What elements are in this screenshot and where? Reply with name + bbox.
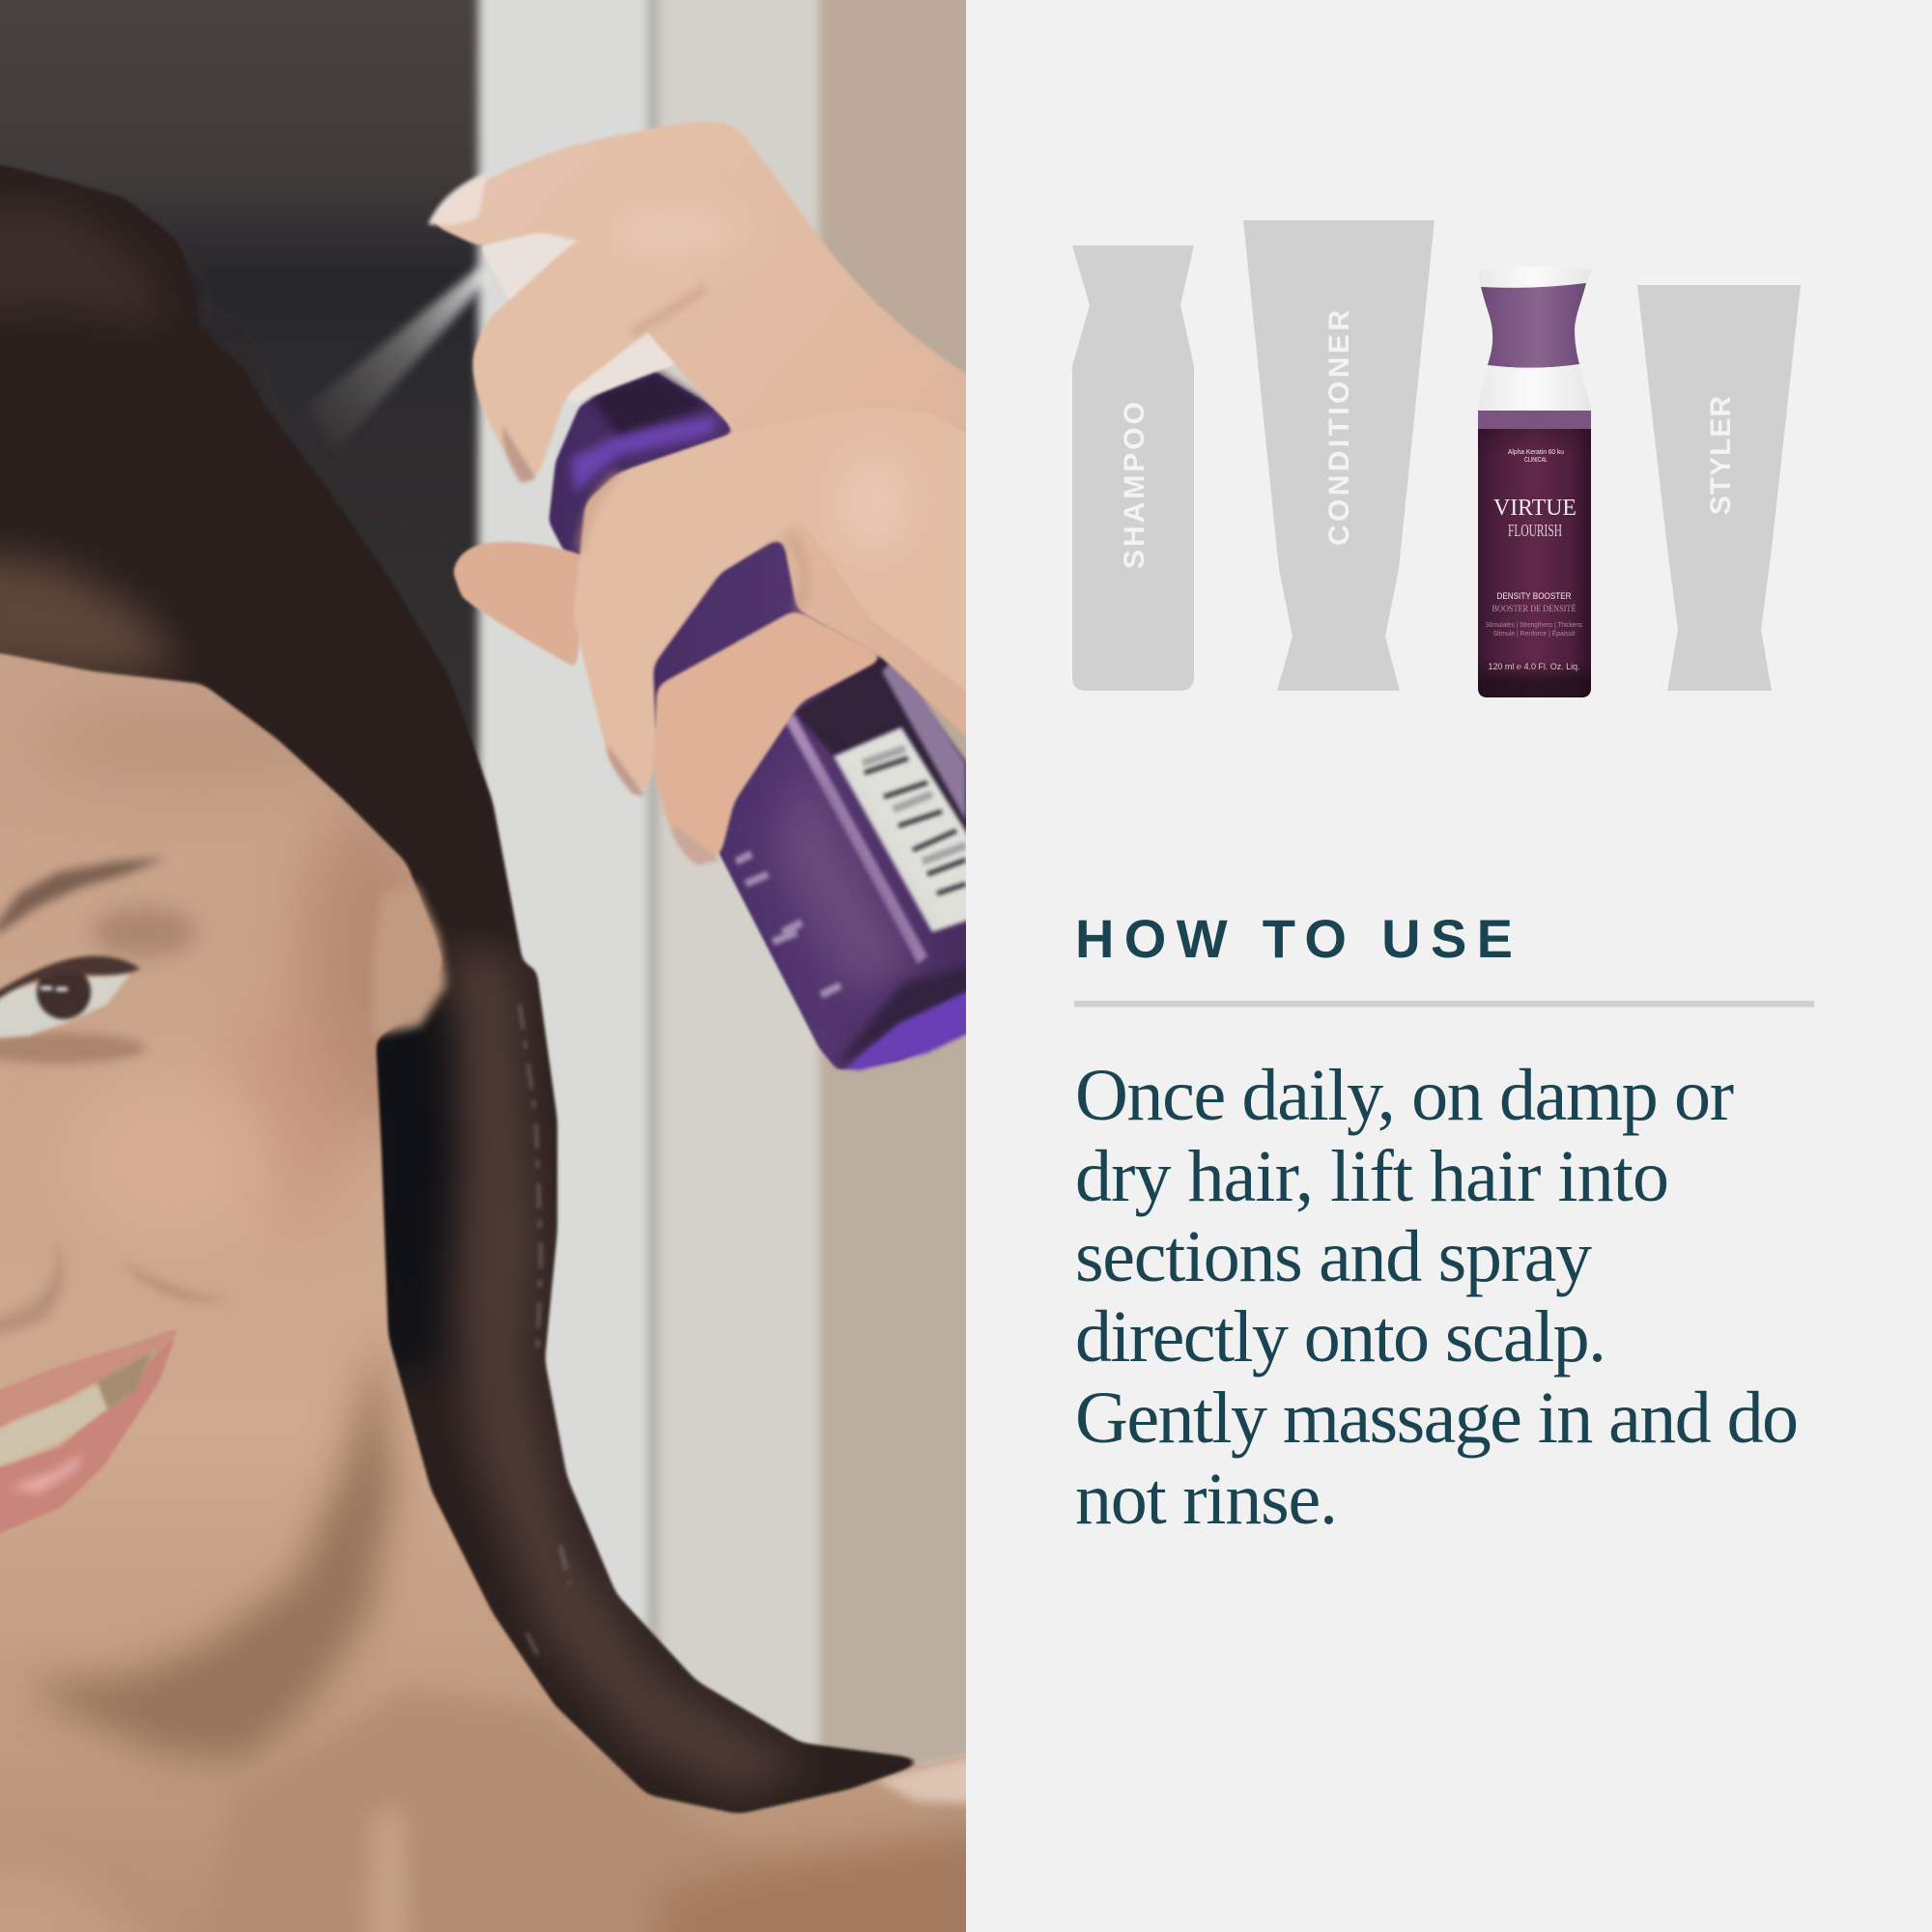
printed text marks on bottle [736, 854, 840, 995]
thumb [453, 542, 591, 668]
bottle label text: Alpha Keratin 60 ku [1508, 447, 1564, 456]
instructions text block: dry hair, lift hair into [1075, 1136, 1669, 1217]
woman: nose and smile line [0, 1236, 232, 1335]
white barcode label [834, 727, 1005, 932]
striped text strip on label [882, 657, 966, 821]
instructions text block [1075, 1055, 1799, 1540]
middle finger nail [607, 744, 645, 796]
soft facial shading [29, 700, 483, 1913]
shampoo silhouette: SHAMPOO [1119, 402, 1151, 569]
small nail [502, 425, 536, 483]
instructions text block: directly onto scalp. [1075, 1296, 1606, 1378]
bottle shoulder glint [570, 415, 720, 493]
bottle label text: Stimulates | Strengthens | Thickens [1486, 620, 1582, 629]
dark panel above barcode [795, 654, 1005, 850]
woman: stray hairs and hair-edge flecks [179, 242, 570, 1662]
conditioner silhouette: CONDITIONER [1323, 310, 1355, 546]
bottle label text: FLOURISH [1508, 521, 1562, 540]
divider rule [1074, 1001, 1814, 1007]
white spray pump cap [480, 208, 681, 404]
dark bottle base band [838, 956, 1005, 1063]
woman: eyebrow and eye [0, 858, 198, 1064]
side highlight line [784, 714, 927, 964]
photo background: dark doorway, white pillars and beige wall [0, 0, 1024, 1932]
heading: how to use: HOW TO USE [1075, 908, 1513, 969]
instructions text block: Once daily, on damp or [1075, 1055, 1734, 1136]
bottle label text: VIRTUE [1493, 496, 1577, 521]
fingernail on index finger [428, 172, 488, 225]
middle finger [573, 407, 1024, 796]
bottle label text [1486, 447, 1582, 671]
woman: skin of face, neck and chest [0, 618, 1005, 1932]
bright purple bottle base [845, 974, 1005, 1070]
instructions text block: not rinse. [1075, 1459, 1338, 1540]
bottle label text: BOOSTER DE DENSITÉ [1492, 603, 1577, 614]
product bottle held in hand [549, 367, 1005, 1070]
shoulder highlight [874, 1748, 1005, 1804]
panel: photo of woman spraying product on scalp [0, 0, 966, 1932]
bottle label text: CLINICAL [1524, 455, 1548, 464]
woman: ear [372, 884, 446, 1036]
product lineup: routine bottles [1072, 220, 1801, 697]
spray mist [307, 267, 488, 454]
styler silhouette [1637, 285, 1801, 691]
ring finger [653, 610, 887, 863]
interior hair tones clipped to hair silhouette [0, 203, 811, 1797]
collarbone highlight [365, 1806, 411, 1932]
hand holding bottle [428, 122, 1024, 866]
woman: smiling mouth [0, 1325, 185, 1546]
styler silhouette: STYLER [1705, 396, 1737, 515]
woman: dark hair [0, 164, 932, 1814]
finger creases [580, 288, 805, 611]
chest shadow [657, 1826, 1005, 1932]
bottle dark collar [589, 372, 710, 435]
conditioner silhouette [1243, 220, 1435, 691]
lower bottle sheen [773, 763, 918, 995]
neck base tone [193, 1690, 773, 1932]
shampoo silhouette [1072, 245, 1194, 691]
bottle label text: Stimule | Renforce | Épaissit [1493, 629, 1576, 638]
instructions text block: Gently massage in and do [1075, 1378, 1799, 1459]
bottle body [549, 367, 1005, 1070]
bottle label text: DENSITY BOOSTER [1497, 591, 1572, 602]
panel: how to use content [1072, 220, 1814, 1540]
jaw shadow under chin [24, 1336, 394, 1761]
instructions text block: sections and spray [1075, 1216, 1592, 1297]
back of hand and index finger [431, 122, 1024, 792]
knuckle highlights [836, 449, 913, 555]
crooked index fingertip pressing cap [472, 208, 705, 480]
bottle label text: 120 ml ℮ 4.0 Fl. Oz. Liq. [1488, 662, 1580, 671]
lower neck curve highlight [0, 1864, 184, 1932]
ring finger nail [671, 826, 720, 866]
product: density booster bottle [1477, 267, 1591, 697]
